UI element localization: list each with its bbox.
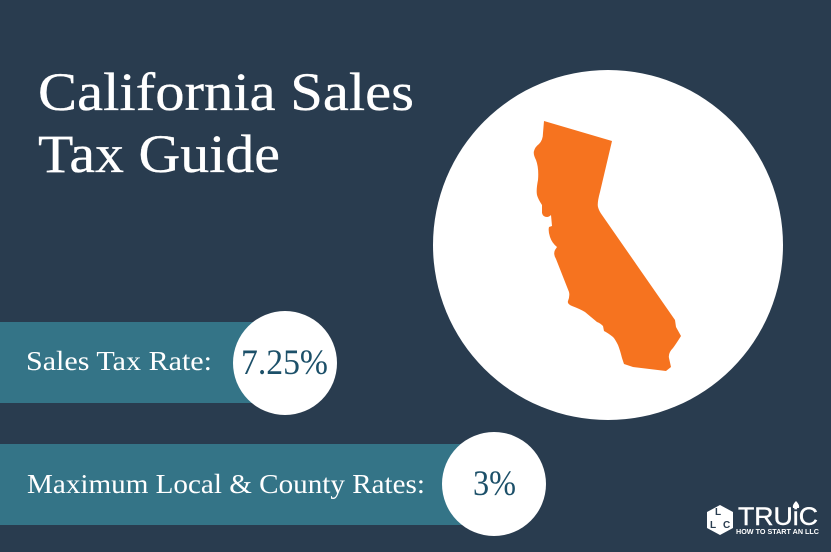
TRUiC logo	[707, 501, 819, 536]
rate circle	[233, 311, 337, 415]
bar label: Maximum Local & County Rates:	[27, 469, 425, 499]
maximum local and county rates bar	[0, 432, 546, 536]
logo wordmark: TRUiC	[738, 503, 818, 531]
sales tax rate bar	[0, 311, 337, 415]
icon: logo flame	[793, 501, 799, 508]
bar label: Sales Tax Rate:	[26, 346, 212, 376]
icon: LLC cube	[707, 505, 733, 535]
title: California Sales	[38, 62, 414, 122]
title	[38, 62, 414, 184]
logo tagline: HOW TO START AN LLC	[736, 529, 819, 536]
icon: LLC cube: C	[723, 520, 730, 531]
icon: California state shape	[534, 121, 681, 371]
icon: LLC cube: L	[715, 507, 721, 518]
title: Tax Guide	[38, 124, 280, 184]
icon: LLC cube: L	[710, 520, 716, 531]
white circle with California map	[433, 70, 783, 420]
rate circle	[442, 432, 546, 536]
rate value: 3%	[473, 463, 516, 503]
rate value: 7.25%	[241, 342, 328, 382]
